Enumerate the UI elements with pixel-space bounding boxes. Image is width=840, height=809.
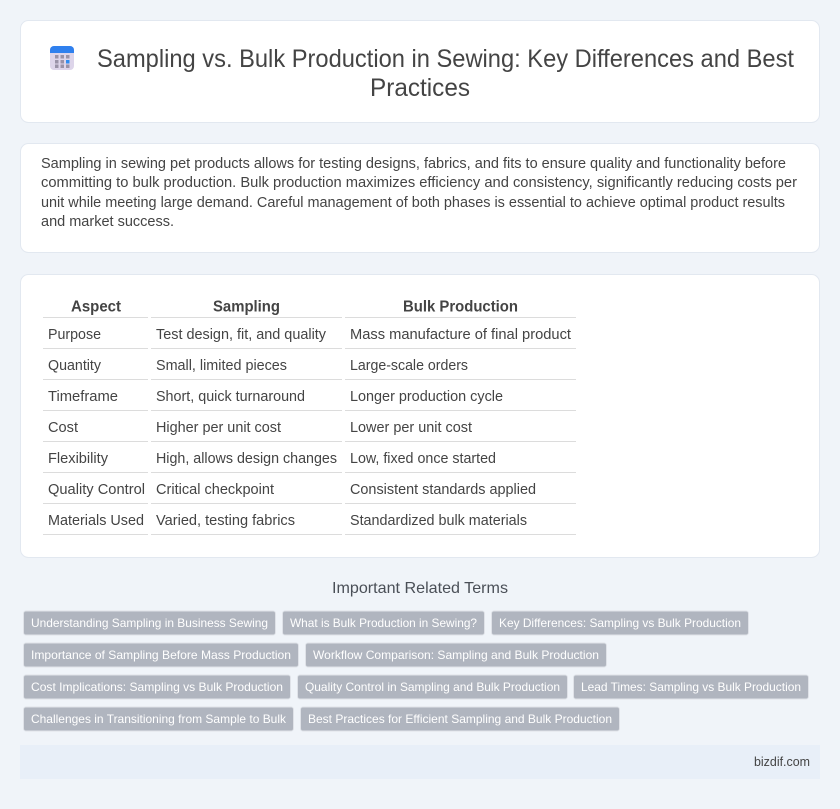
tag bbox=[306, 643, 606, 667]
table header bbox=[71, 298, 518, 316]
tag bbox=[24, 707, 294, 731]
tag: What is Bulk Production in Sewing? bbox=[290, 616, 477, 630]
row: Materials Used: Standardized bulk materials bbox=[350, 513, 527, 529]
panel: intro text bbox=[20, 144, 820, 252]
tag bbox=[282, 611, 484, 635]
row: Flexibility: Low, fixed once started bbox=[350, 451, 496, 467]
row: Quality Control: Consistent standards applied bbox=[350, 482, 536, 498]
row: Materials Used: Materials Used bbox=[48, 513, 144, 529]
tag bbox=[24, 611, 276, 635]
title: Sampling vs. Bulk Production in Sewing: Key Differences and Best bbox=[97, 45, 794, 73]
tag: Workflow Comparison: Sampling and Bulk Production bbox=[313, 648, 599, 662]
tag bbox=[574, 675, 808, 699]
panel: intro text: Sampling in sewing pet products allows for testing designs, fabrics, and fits to ensure quality and functionality before bbox=[41, 156, 786, 172]
panel: comparison table bbox=[20, 274, 820, 558]
footer bar bbox=[20, 745, 820, 779]
row: Cost: Higher per unit cost bbox=[156, 420, 281, 436]
row: Timeframe: Longer production cycle bbox=[350, 389, 503, 405]
tag: Understanding Sampling in Business Sewing bbox=[31, 616, 268, 630]
row: Cost: Lower per unit cost bbox=[350, 420, 472, 436]
row: Cost: Cost bbox=[48, 420, 78, 436]
tag bbox=[298, 675, 568, 699]
title bbox=[97, 45, 794, 102]
row: Purpose: Test design, fit, and quality bbox=[156, 327, 327, 343]
row: Quantity: Large-scale orders bbox=[350, 358, 468, 374]
tag: Key Differences: Sampling vs Bulk Production bbox=[499, 616, 741, 630]
row: Quantity: Quantity bbox=[48, 358, 102, 374]
related term tags bbox=[24, 611, 808, 731]
tag: Quality Control in Sampling and Bulk Production bbox=[305, 680, 560, 694]
row: Flexibility bbox=[48, 451, 496, 467]
tag: Best Practices for Efficient Sampling and Bulk Production bbox=[308, 712, 612, 726]
row: Purpose: Purpose bbox=[48, 327, 101, 343]
footer bar: bizdif.com bbox=[754, 754, 810, 769]
title: Practices bbox=[370, 74, 470, 102]
row: Flexibility: High, allows design changes bbox=[156, 451, 337, 467]
icon: calendar bbox=[50, 46, 74, 70]
tag bbox=[492, 611, 748, 635]
row: Materials Used bbox=[48, 513, 527, 529]
row: Flexibility: Flexibility bbox=[48, 451, 109, 467]
row: Quality Control bbox=[48, 482, 536, 498]
panel: title card bbox=[20, 20, 820, 122]
panel: intro text: unit while meeting large demand. Careful management of both phases is essential to achieve optimal product results bbox=[41, 195, 785, 211]
panel: intro text: committing to bulk production. Bulk production maximizes efficiency and consistency, significantly reducing costs per bbox=[41, 175, 797, 191]
row: Timeframe: Timeframe bbox=[48, 389, 118, 405]
tag bbox=[24, 643, 298, 667]
table header: Bulk Production bbox=[403, 298, 518, 316]
table header: Aspect bbox=[71, 298, 121, 316]
panel: intro text: and market success. bbox=[41, 214, 174, 230]
tag bbox=[24, 675, 290, 699]
tag: Importance of Sampling Before Mass Production bbox=[31, 648, 291, 662]
row: Quality Control: Critical checkpoint bbox=[156, 482, 274, 498]
tag bbox=[300, 707, 620, 731]
row: Cost bbox=[48, 420, 472, 436]
table header: Sampling bbox=[213, 298, 280, 316]
row: Quantity bbox=[48, 358, 468, 374]
heading: related terms: Important Related Terms bbox=[332, 580, 508, 597]
row: Materials Used: Varied, testing fabrics bbox=[156, 513, 295, 529]
row: Quality Control: Quality Control bbox=[48, 482, 145, 498]
tag: Cost Implications: Sampling vs Bulk Production bbox=[31, 680, 283, 694]
row: Quantity: Small, limited pieces bbox=[156, 358, 287, 374]
row: Purpose: Mass manufacture of final product bbox=[350, 327, 571, 343]
row: Purpose bbox=[48, 327, 571, 343]
row: Timeframe bbox=[48, 389, 503, 405]
row: Timeframe: Short, quick turnaround bbox=[156, 389, 305, 405]
tag: Challenges in Transitioning from Sample to Bulk bbox=[31, 712, 287, 726]
tag: Lead Times: Sampling vs Bulk Production bbox=[581, 680, 801, 694]
